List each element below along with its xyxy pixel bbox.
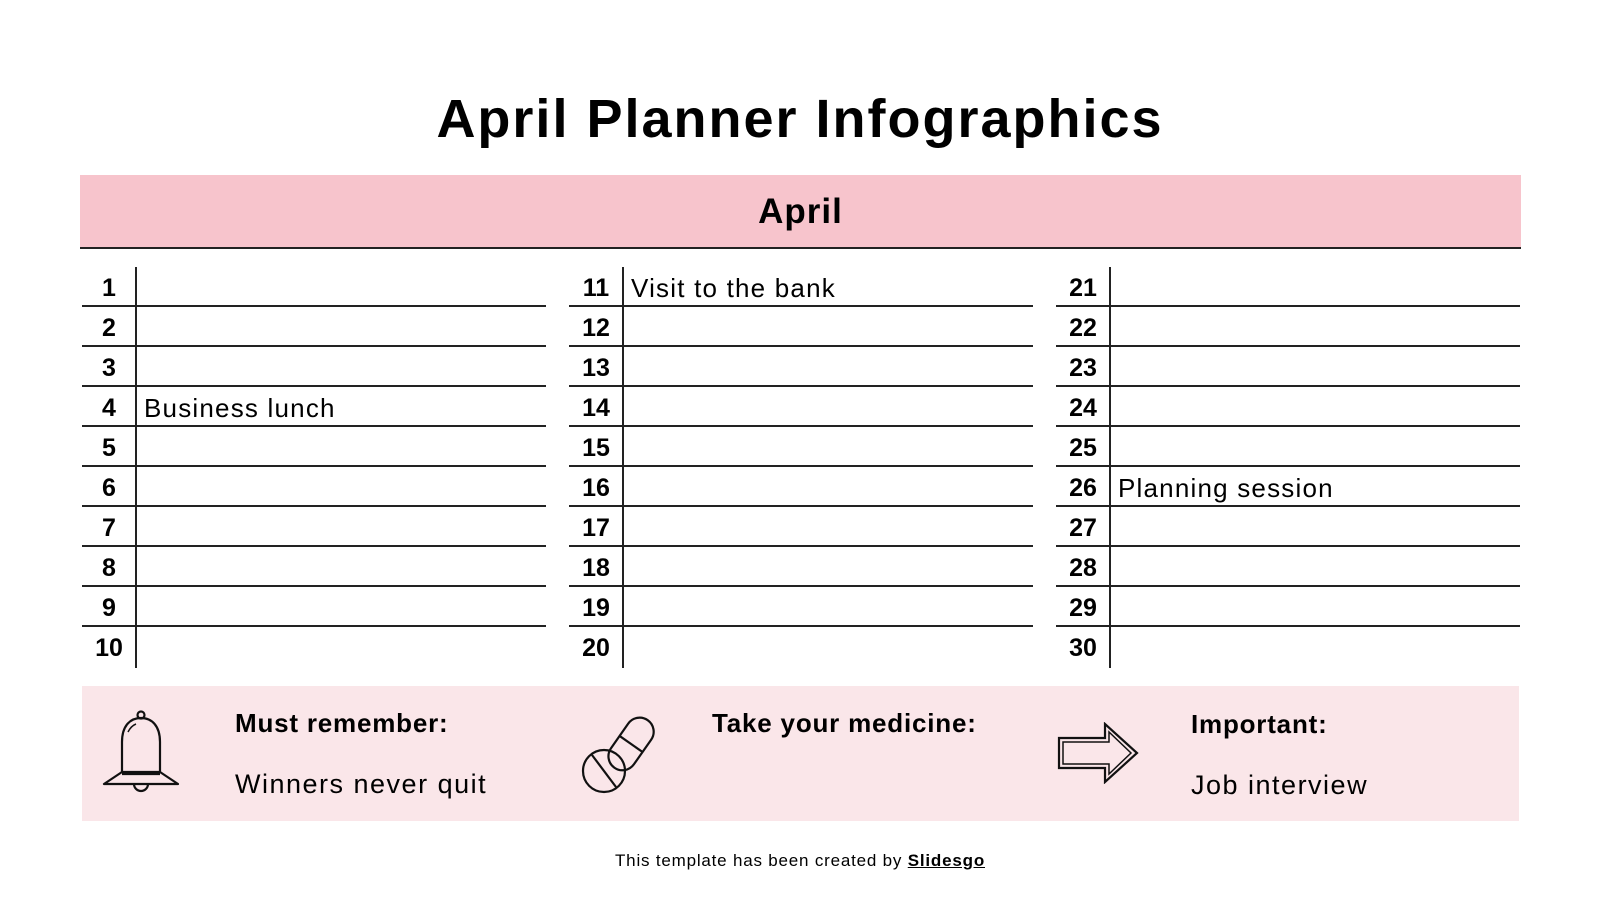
title: April Planner Infographics: [436, 89, 1164, 149]
label: must remember: Must remember:: [235, 708, 448, 738]
column: days 1-10: 1: [102, 274, 116, 302]
icon: bell: [102, 710, 180, 792]
column: days 11-20: 14: [582, 394, 610, 422]
column: days 21-30: 27: [1069, 514, 1097, 542]
column: days 11-20: 20: [582, 634, 610, 662]
column: days 1-10: [82, 267, 546, 668]
column: days 11-20: 18: [582, 554, 610, 582]
column: days 21-30: 28: [1069, 554, 1097, 582]
column: days 1-10: 2: [102, 314, 116, 342]
month banner: April: [758, 192, 843, 231]
column: days 11-20: 15: [582, 434, 610, 462]
column: days 21-30: 21: [1069, 274, 1097, 302]
column: days 21-30: 22: [1069, 314, 1097, 342]
text: job interview: Job interview: [1191, 770, 1368, 800]
column: days 21-30: 29: [1069, 594, 1097, 622]
column: days 11-20: 16: [582, 474, 610, 502]
notes panel: [82, 686, 1519, 821]
column: days 1-10: 9: [102, 594, 116, 622]
icon: pills: [582, 716, 655, 794]
column: days 1-10: 6: [102, 474, 116, 502]
label: take your medicine: Take your medicine:: [712, 708, 977, 738]
column: days 11-20: 12: [582, 314, 610, 342]
column: days 11-20: Visit to the bank: [631, 273, 836, 303]
column: days 21-30: 25: [1069, 434, 1097, 462]
column: days 11-20: 13: [582, 354, 610, 382]
column: days 1-10: 4: [102, 394, 116, 422]
column: days 21-30: 24: [1069, 394, 1097, 422]
month banner: [80, 175, 1521, 249]
column: days 21-30: 23: [1069, 354, 1097, 382]
column: days 1-10: 7: [102, 514, 116, 542]
column: days 1-10: 3: [102, 354, 116, 382]
column: days 1-10: 8: [102, 554, 116, 582]
column: days 1-10: 10: [95, 634, 123, 662]
column: days 21-30: [1056, 267, 1520, 668]
column: days 11-20: 11: [583, 274, 609, 302]
column: days 21-30: Planning session: [1118, 473, 1334, 503]
icon: arrow: [1058, 722, 1138, 784]
footer credit: This template has been created by Slidesgo: [615, 851, 985, 870]
label: important: Important:: [1191, 709, 1328, 739]
column: days 21-30: 26: [1069, 474, 1097, 502]
column: days 11-20: 17: [582, 514, 610, 542]
column: days 1-10: 5: [102, 434, 116, 462]
column: days 1-10: Business lunch: [144, 393, 336, 423]
column: days 11-20: [569, 267, 1033, 668]
column: days 21-30: 30: [1069, 634, 1097, 662]
text: winners never quit: Winners never quit: [235, 769, 487, 799]
column: days 11-20: 19: [582, 594, 610, 622]
